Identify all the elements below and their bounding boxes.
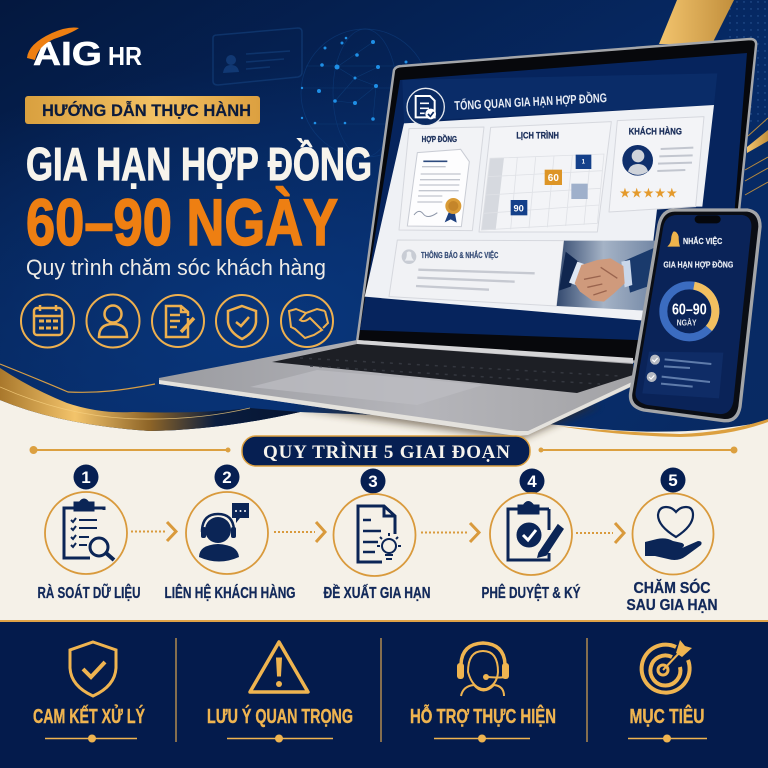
logo: AIG	[33, 35, 102, 72]
dashboard title: TỔNG QUAN GIA HẠN HỢP ĐỒNG	[454, 90, 607, 113]
icon: handshake	[281, 295, 333, 347]
laptop	[159, 39, 756, 436]
laptop base	[159, 340, 633, 436]
laptop lid	[357, 39, 756, 375]
gold stripes, upper right	[659, 0, 768, 195]
icon: clipboard with magnifier	[64, 500, 114, 560]
phone ring chart	[663, 285, 715, 337]
badge: HƯỚNG DẪN THỰC HÀNH	[42, 101, 251, 120]
card: schedule: 1	[582, 160, 586, 166]
heading: 5 stages: QUY TRÌNH 5 GIAI ĐOẠN	[263, 441, 510, 463]
step 2	[164, 464, 296, 602]
subtitle: Quy trình chăm sóc khách hàng	[26, 255, 326, 280]
card: notifications: THÔNG BÁO & NHẮC VIỆC	[421, 251, 499, 260]
step 4: PHÊ DUYỆT & KÝ	[482, 583, 581, 602]
icon: document badge	[407, 88, 444, 126]
feature: support: HỖ TRỢ THỰC HIỆN	[410, 704, 556, 728]
card: schedule	[479, 122, 611, 232]
phone checklist	[642, 352, 723, 398]
screen header band	[402, 73, 717, 123]
card: schedule: LỊCH TRÌNH	[516, 129, 559, 140]
icon: warning triangle	[250, 642, 308, 692]
card: schedule: 90	[513, 203, 524, 213]
feature: notes	[207, 642, 353, 742]
dividers	[176, 638, 587, 742]
icon: person	[86, 294, 140, 348]
feature: commitment	[33, 642, 145, 742]
laptop shadow	[290, 405, 600, 440]
phone reminder heading	[667, 231, 723, 247]
background network globe	[301, 29, 429, 157]
logo: HR	[108, 41, 142, 71]
step 1: 1	[81, 468, 91, 487]
dashboard panel	[365, 105, 714, 321]
card: customer	[609, 117, 704, 212]
step 4	[482, 468, 581, 602]
phone	[630, 210, 760, 421]
arrow 3	[421, 523, 479, 542]
feature: notes: LƯU Ý QUAN TRỌNG	[207, 704, 353, 728]
step 1	[38, 464, 140, 602]
heading: 5 stages	[242, 436, 530, 466]
step 3	[324, 468, 430, 602]
phone ring chart: 60–90	[672, 301, 707, 318]
feature: goal	[628, 640, 707, 742]
card: contract	[399, 127, 484, 231]
hero background	[0, 0, 768, 432]
icon: document with pen	[152, 295, 204, 347]
bottom panel	[0, 620, 768, 768]
card: schedule: 60	[548, 173, 559, 184]
step 5: CHĂM SÓC	[634, 578, 711, 597]
card: customer: ★★★★★	[619, 185, 678, 200]
icon: document with bulb	[358, 506, 401, 562]
phone ring chart: NGÀY	[677, 319, 697, 328]
title: GIA HẠN HỢP ĐỒNG	[26, 138, 372, 190]
step 5	[626, 468, 718, 614]
title highlight: 60–90 NGÀY	[26, 185, 338, 259]
icon: shield	[216, 295, 268, 347]
gold swoosh	[0, 364, 300, 431]
icon: clipboard with check and pen	[508, 502, 563, 560]
icon: headset agent	[457, 643, 509, 696]
card: notifications	[389, 240, 564, 306]
phone title: GIA HẠN HỢP ĐỒNG	[663, 258, 734, 269]
photo: handshake	[557, 241, 661, 311]
icon: target with arrow	[642, 640, 692, 693]
step 2: 2	[222, 468, 232, 487]
feature: commitment: CAM KẾT XỬ LÝ	[33, 704, 145, 728]
feature: goal: MỤC TIÊU	[630, 704, 704, 728]
step 3: 3	[368, 472, 378, 491]
arrow 2	[274, 522, 325, 542]
arrow 4	[576, 523, 624, 543]
icon: calendar	[21, 294, 74, 348]
step 1: RÀ SOÁT DỮ LIỆU	[38, 582, 140, 602]
step 2: LIÊN HỆ KHÁCH HÀNG	[164, 583, 296, 602]
card: contract: HỢP ĐỒNG	[422, 133, 457, 144]
feature: support	[410, 643, 556, 742]
step 3: ĐỀ XUẤT GIA HẠN	[324, 583, 430, 602]
card: customer: KHÁCH HÀNG	[629, 126, 682, 137]
step 5: SAU GIA HẠN	[626, 597, 718, 614]
step 5: 5	[668, 471, 678, 490]
icon row	[21, 294, 333, 348]
logo	[27, 28, 142, 72]
phone reminder heading: NHẮC VIỆC	[683, 235, 723, 246]
arrow 1	[131, 522, 176, 541]
gold edge of hero, right	[558, 419, 768, 437]
icon: hand holding heart	[645, 507, 702, 560]
step 4: 4	[527, 472, 537, 491]
icon: shield check	[70, 642, 116, 696]
badge	[25, 96, 260, 124]
phone body	[630, 210, 760, 421]
cream band lines	[30, 447, 736, 453]
background id card	[213, 28, 302, 85]
laptop screen content	[365, 73, 717, 321]
phone screen	[635, 215, 751, 414]
icon: support agent	[199, 503, 249, 562]
